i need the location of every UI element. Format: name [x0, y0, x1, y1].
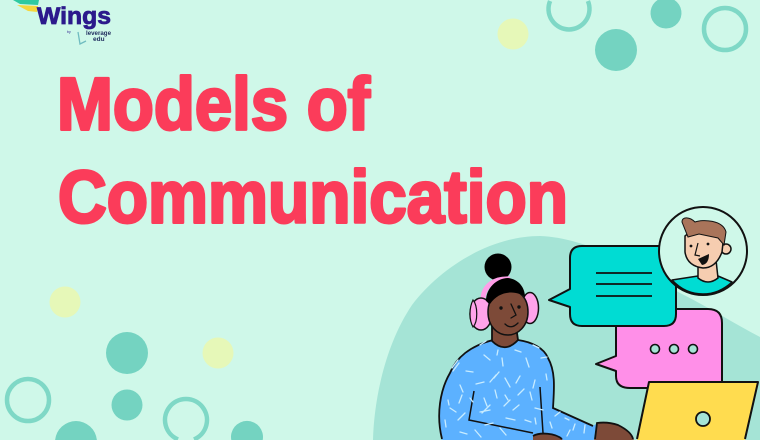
- neck: [492, 326, 518, 347]
- sweater confetti pattern: [445, 341, 585, 437]
- logo: Wings by leverage edu: Wings: [37, 3, 111, 30]
- face: [488, 290, 528, 335]
- sweater arm lines: [469, 387, 543, 433]
- person with headphones at laptop: [439, 254, 634, 440]
- avatar: man in circle: [659, 207, 747, 295]
- headphones: [483, 279, 510, 298]
- decorative circles: bottom left: [7, 286, 263, 440]
- hair bun: [484, 254, 512, 280]
- logo: Wings by leverage edu: [13, 0, 111, 44]
- facial features: [499, 306, 503, 310]
- hands: [594, 423, 634, 440]
- speech bubble: pink with dots: [596, 309, 722, 388]
- title: [57, 62, 568, 238]
- laptop: [637, 382, 758, 440]
- sweater: [439, 340, 596, 440]
- speech bubble: teal with lines: [549, 246, 676, 326]
- decorative circles: top right: [498, 0, 746, 71]
- hair: [486, 278, 525, 304]
- title: Models of: [57, 62, 370, 146]
- logo: Wings by leverage edu: by: [67, 30, 71, 34]
- title: Communication: [58, 156, 568, 238]
- logo: Wings by leverage edu: edu: [93, 36, 105, 43]
- logo: Wings by leverage edu: leverage: [86, 30, 111, 37]
- background blob: [373, 236, 760, 440]
